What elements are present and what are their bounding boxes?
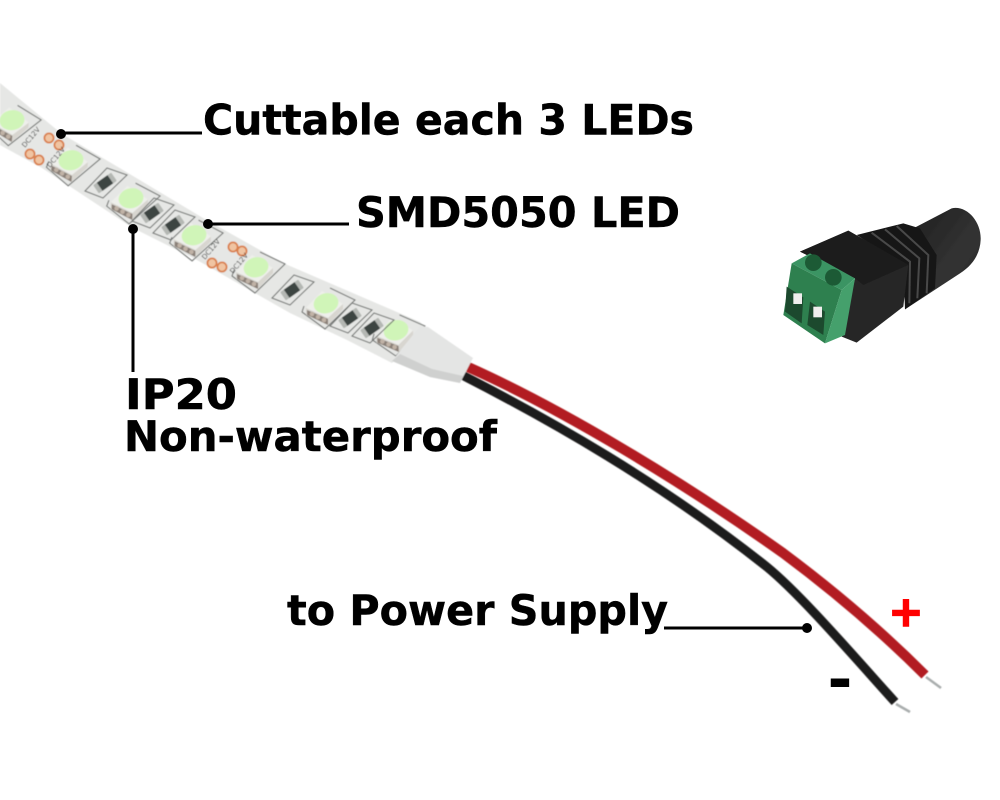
wire tip: red conductor bbox=[926, 677, 941, 688]
strip markings: DC12V bbox=[228, 252, 250, 275]
callout: SMD5050 bbox=[203, 188, 680, 237]
connector: DC jack with green terminal bbox=[783, 208, 981, 343]
strip body bbox=[0, 83, 428, 363]
barrel bbox=[905, 208, 981, 309]
callout: IP20: Non-waterproof bbox=[124, 412, 498, 461]
wire tip: black conductor bbox=[896, 704, 910, 712]
strip markings: DC12V bbox=[200, 238, 222, 261]
minus sign: - bbox=[828, 645, 852, 715]
callout: IP20 bbox=[124, 224, 498, 461]
end sleeve bbox=[392, 326, 473, 383]
black body bbox=[800, 231, 908, 343]
callout: cuttable: Cuttable each 3 LEDs bbox=[203, 96, 694, 144]
green terminal bbox=[783, 253, 855, 343]
strip markings: DC12V bbox=[20, 126, 42, 149]
LED chips bbox=[0, 102, 426, 357]
ribbed sleeve bbox=[857, 223, 937, 309]
rib grooves bbox=[872, 226, 928, 303]
copper pads bbox=[25, 133, 247, 272]
callout: SMD5050: SMD5050 LED bbox=[356, 188, 680, 237]
callout: IP20: IP20 bbox=[125, 370, 237, 419]
LED strip bbox=[0, 83, 941, 712]
callout: power supply: to Power Supply bbox=[287, 586, 668, 635]
resistors bbox=[85, 168, 394, 343]
wire: red bbox=[468, 367, 925, 675]
plus sign: + bbox=[888, 587, 924, 636]
strip markings: DC12V bbox=[45, 146, 67, 169]
wire: black bbox=[462, 375, 895, 702]
strip markings bbox=[20, 126, 250, 275]
